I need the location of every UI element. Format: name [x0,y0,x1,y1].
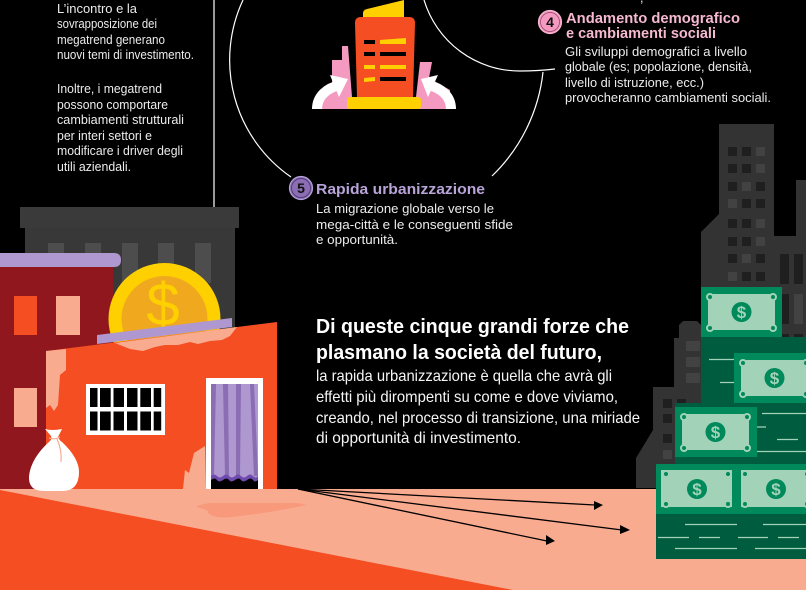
banknote [701,287,782,337]
money stack [656,287,806,559]
purple ledge [97,318,232,344]
text block: megatrend intro: sovrapposizione dei [57,17,157,31]
banknote [734,353,806,403]
item 5: rapid urbanisation: e opportunità. [316,233,398,247]
item 4: demographic trend: globale (es; popolazione, densità, [565,60,752,74]
main statement: la rapida urbanizzazione è quella che avrà gli [316,368,612,385]
item 4: demographic trend: Gli sviluppi demografici a livello [565,45,747,59]
arrows [298,489,630,545]
icon: gold coin [108,263,220,375]
text block: megatrend intro [57,2,194,174]
skyline windows [663,147,803,459]
item 4: demographic trend: livello di istruzione, ecc.) [565,76,704,90]
item 5: rapid urbanisation: Rapida urbanizzazione [316,182,485,198]
item 5: rapid urbanisation: La migrazione globale verso le [316,202,494,216]
item 4: demographic trend: Andamento demografico [566,11,740,27]
item 4: demographic trend: provocheranno cambiamenti sociali. [565,91,771,105]
banknote: $ [770,369,780,388]
main statement [316,316,640,447]
ground [0,489,806,590]
text block: megatrend intro: cambiamenti strutturali [57,113,184,127]
icon: garbage bag [29,429,79,491]
banknote: $ [692,480,702,499]
peeling plaster [46,327,237,489]
banknote: $ [711,423,721,442]
banknote [675,407,757,457]
text block: megatrend intro: possono comportare [57,98,168,112]
icon: gold coin: $ [146,271,180,338]
number badge 4 [538,10,562,34]
banknote: $ [737,303,747,322]
connector lines [214,0,555,207]
door with curtain [206,378,263,489]
text block: megatrend intro: per interi settori e [57,129,152,143]
banknote: $ [771,480,781,499]
number badge 5 [290,176,312,200]
item 5: rapid urbanisation: mega-città e le conseguenti sfide [316,218,513,232]
skyline right [636,124,806,488]
barred window [86,384,165,435]
text block: megatrend intro: utili aziendali. [57,160,131,174]
text block: megatrend intro: nuovi temi di investimento. [57,48,194,62]
main statement: effetti più dirompenti su come e dove viviamo, [316,389,618,406]
text block: megatrend intro: megatrend generano [57,33,165,47]
number badge 4: 4 [546,14,554,30]
main statement: plasmano la società del futuro, [316,342,602,364]
item 4: demographic trend [538,0,771,105]
main statement: di opportunità di investimento. [316,430,521,447]
text block: megatrend intro: Inoltre, i megatrend [57,82,162,96]
banknote [737,464,806,514]
icon: urban tower with arrows [317,0,451,109]
banknote [656,464,737,514]
item 5: rapid urbanisation [290,176,513,247]
orange house [46,318,277,489]
main statement: Di queste cinque grandi forze che [316,316,629,338]
red building [0,253,121,490]
number badge 5: 5 [297,180,305,196]
text block: megatrend intro: modificare i driver degli [57,144,183,158]
background building left [20,207,239,348]
main statement: creando, nel processo di transizione, una miriade [316,410,640,427]
item 4: demographic trend: e cambiamenti sociali [566,26,716,42]
text block: megatrend intro: L’incontro e la [57,2,137,16]
